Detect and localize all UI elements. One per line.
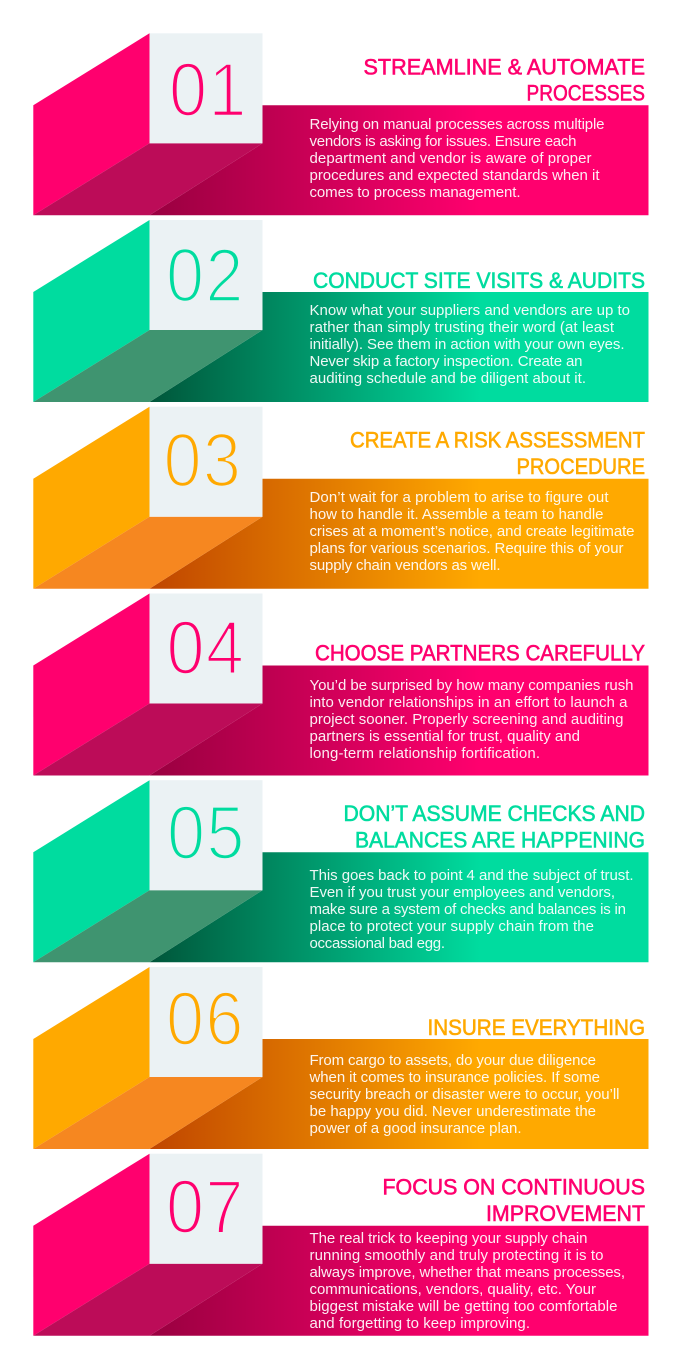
body text: You’d be surprised by how many companies rush [310,677,634,694]
body text: Don’t wait for a problem to arise to figure out [310,489,609,506]
body text [310,302,630,387]
body text: make sure a system of checks and balances is in [310,901,626,918]
panel: step 05 checks and balances [33,780,649,962]
shape: band with body background [150,1226,648,1336]
shape: left face [33,33,149,215]
body text: comes to process management. [310,184,520,201]
shape: floor [33,1264,262,1336]
heading: INSURE EVERYTHING [428,1015,645,1040]
body text: department and vendor is aware of proper [310,150,592,167]
body text: and forgetting to keep improving. [310,1315,530,1332]
heading: DON’T ASSUME CHECKS AND [344,801,645,826]
heading: IMPROVEMENT [486,1201,645,1226]
body text: procedures and expected standards when it [310,167,600,184]
shape: band with body background [150,292,648,402]
shape: band with body background [150,852,648,962]
shape: floor [33,330,262,402]
shape: number tile [150,967,262,1077]
heading [350,428,645,479]
shape: band with body background [150,479,648,589]
body text: crises at a moment’s notice, and create legitimate [310,523,634,540]
shape: number tile [150,594,262,704]
number 07: 07 [166,1166,245,1250]
shape: floor [33,517,262,589]
shape: left face [33,780,149,962]
number 01: 01 [169,49,248,133]
body text: From cargo to assets, do your due diligence [310,1052,596,1069]
body text: partners is essential for trust, quality and [310,728,580,745]
shape: number tile [150,33,262,143]
shape: number tile [150,1154,262,1264]
number 05: 05 [167,792,246,876]
heading: STREAMLINE & AUTOMATE [364,54,645,80]
number 04: 04 [166,607,245,691]
body text: into vendor relationships in an effort to launch a [310,694,628,711]
shape: left face [33,1154,149,1336]
shape: number tile [150,780,262,890]
body text: project sooner. Properly screening and auditing [310,711,624,728]
panel: step 06 insure everything [33,967,649,1149]
shape: left face [33,407,149,589]
shape: left face [33,220,149,402]
number 06: 06 [166,978,245,1062]
shape: floor [33,143,262,215]
body text: how to handle it. Assemble a team to handle [310,506,604,523]
body text: biggest mistake will be getting too comfortable [310,1298,618,1315]
shape: band with body background [150,1039,648,1149]
body text: long-term relationship fortification. [310,745,540,762]
shape: number tile [150,407,262,517]
panel: step 07 continuous improvement [33,1154,649,1336]
shape: floor [33,704,262,776]
body text [310,489,634,574]
heading [344,801,645,852]
panel: step 04 choose partners carefully [33,594,649,776]
body text: Never skip a factory inspection. Create an [310,353,582,370]
shape: left face [33,967,149,1149]
heading: CHOOSE PARTNERS CAREFULLY [315,640,645,666]
body text: Know what your suppliers and vendors are up to [310,302,630,319]
heading: CREATE A RISK ASSESSMENT [350,428,645,452]
body text: be happy you did. Never underestimate the [310,1103,596,1120]
panel: step 03 risk assessment procedure [33,407,649,589]
body text: communications, vendors, quality, etc. Your [310,1281,596,1298]
heading [382,1174,645,1226]
body text [310,677,634,762]
body text: The real trick to keeping your supply chain [310,1230,588,1247]
body text [310,116,604,201]
body text: Even if you trust your employees and vendors, [310,884,615,901]
body text: occassional bad egg. [310,935,445,952]
heading: PROCEDURE [516,454,645,479]
body text: power of a good insurance plan. [310,1120,522,1137]
shape: band with body background [150,105,648,215]
heading: PROCESSES [526,80,645,106]
heading [364,54,645,106]
body text: plans for various scenarios. Require this of your [310,540,624,557]
number 03: 03 [164,419,242,503]
body text [310,1230,625,1332]
body text: security breach or disaster were to occur, you’ll [310,1086,620,1103]
body text: auditing schedule and be diligent about it. [310,370,586,387]
body text: place to protect your supply chain from the [310,918,594,935]
body text: Relying on manual processes across multiple [310,116,604,133]
body text [310,867,634,952]
body text: supply chain vendors as well. [310,557,500,574]
shape: floor [33,890,262,962]
body text: This goes back to point 4 and the subject of trust. [310,867,634,884]
body text: rather than simply trusting their word (at least [310,319,615,336]
body text: when it comes to insurance policies. If some [308,1069,600,1086]
body text: running smoothly and truly protecting it is to [310,1247,604,1264]
panel: step 01 streamline and automate [33,33,649,215]
panel: step 02 site visits and audits [33,220,649,402]
shape: left face [33,594,149,776]
body text: initially). See them in action with your own eyes. [310,336,624,353]
shape: floor [33,1077,262,1149]
number 02: 02 [166,234,245,318]
shape: number tile [150,220,262,330]
body text: vendors is asking for issues. Ensure each [310,133,576,150]
body text [308,1052,620,1137]
heading: FOCUS ON CONTINUOUS [382,1174,645,1200]
shape: band with body background [150,666,648,776]
heading: BALANCES ARE HAPPENING [355,828,645,852]
body text: always improve, whether that means processes, [310,1264,625,1281]
heading: CONDUCT SITE VISITS & AUDITS [313,268,645,293]
